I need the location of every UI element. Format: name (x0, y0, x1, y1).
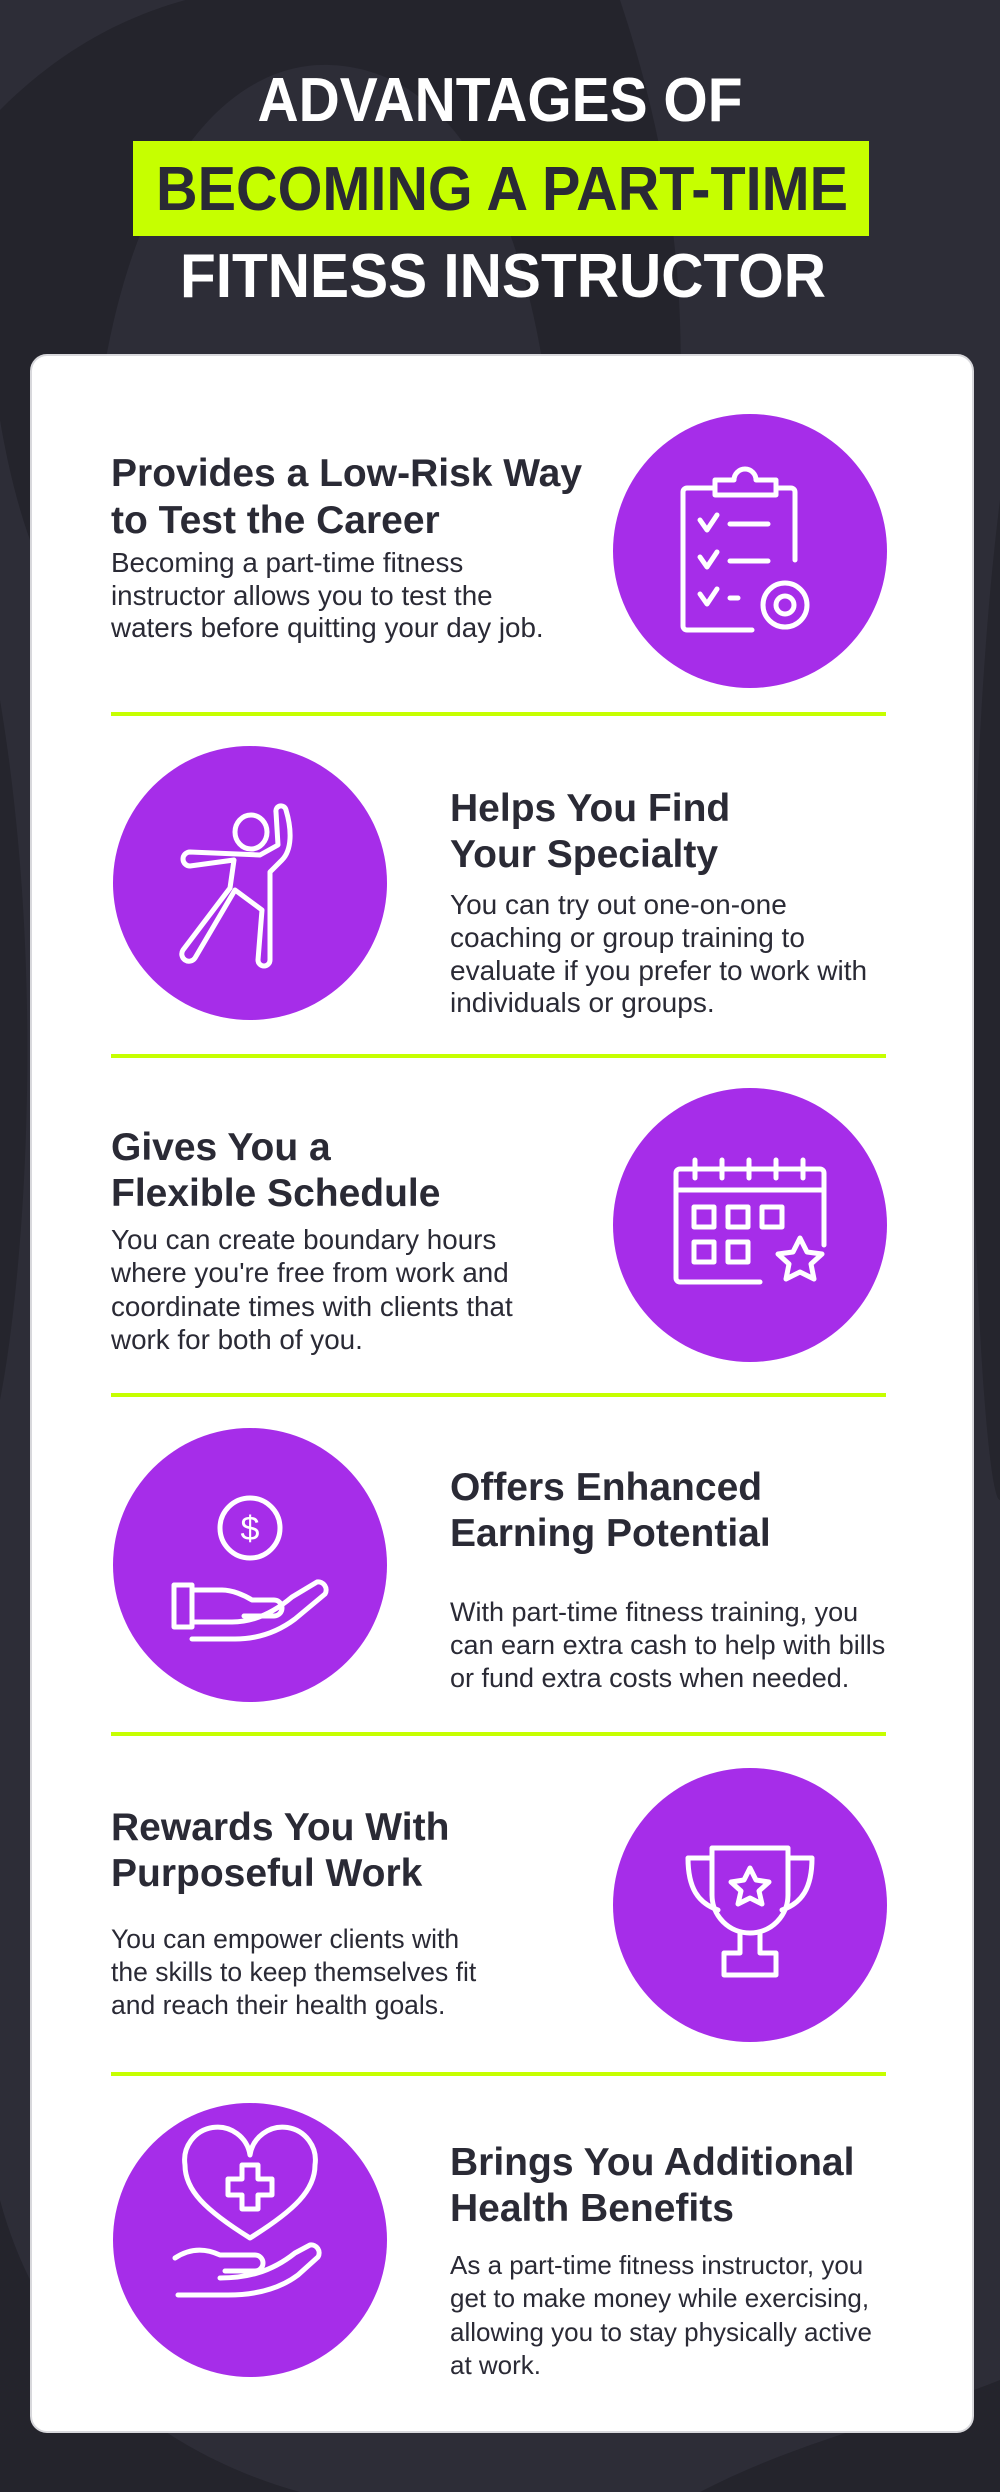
section 4 (113, 1428, 885, 1702)
heading 5: Purposeful Work (111, 1852, 423, 1895)
text 1: Becoming a part-time fitness (111, 547, 463, 578)
text 4: can earn extra cash to help with bills (450, 1630, 885, 1660)
text 5: and reach their health goals. (111, 1990, 445, 2020)
icon: heart hand (113, 2103, 387, 2377)
text 6: As a part-time fitness instructor, you (450, 2250, 863, 2280)
title (133, 66, 869, 311)
section 1 (110, 414, 887, 688)
heading 2: Helps You Find (450, 787, 730, 830)
text 3: coordinate times with clients that (111, 1291, 513, 1322)
title: FITNESS INSTRUCTOR (180, 242, 826, 311)
title: BECOMING A PART-TIME (156, 155, 848, 224)
heading 3: Gives You a (111, 1126, 331, 1169)
text 1: waters before quitting your day job. (110, 612, 544, 643)
text 2: coaching or group training to (450, 922, 805, 953)
text 2: You can try out one-on-one (450, 889, 787, 920)
icon: trophy (613, 1768, 887, 2042)
icon: clipboard (613, 414, 887, 688)
text 3: where you're free from work and (110, 1257, 509, 1288)
text 5: You can empower clients with (111, 1924, 459, 1954)
text 6: get to make money while exercising, (450, 2283, 869, 2313)
heading 3: Flexible Schedule (111, 1172, 440, 1215)
icon: calendar (613, 1088, 887, 1362)
text 4: With part-time fitness training, you (450, 1597, 858, 1627)
panel: card (31, 355, 973, 2432)
section 2 (113, 746, 867, 1020)
text 2: evaluate if you prefer to work with (450, 955, 867, 986)
text 1: instructor allows you to test the (111, 580, 493, 611)
section 3 (110, 1088, 887, 1362)
icon: money hand (113, 1428, 387, 1702)
heading 5: Rewards You With (111, 1806, 449, 1849)
icon: money hand: $ (241, 1510, 260, 1548)
text 4: or fund extra costs when needed. (450, 1663, 849, 1693)
text 6: at work. (450, 2350, 541, 2380)
heading 4: Offers Enhanced (450, 1466, 762, 1509)
heading 2: Your Specialty (450, 833, 718, 876)
icon: person (113, 746, 387, 1020)
text 3: work for both of you. (110, 1324, 363, 1355)
text 5: the skills to keep themselves fit (111, 1957, 477, 1987)
heading 4: Earning Potential (450, 1512, 771, 1555)
text 6: allowing you to stay physically active (450, 2317, 872, 2347)
heading 1: to Test the Career (111, 499, 440, 542)
text 2: individuals or groups. (450, 987, 715, 1018)
heading 6: Brings You Additional (450, 2141, 854, 2184)
heading 1: Provides a Low-Risk Way (111, 452, 582, 495)
section 6 (113, 2103, 872, 2380)
title: ADVANTAGES OF (258, 66, 742, 135)
text 3: You can create boundary hours (111, 1224, 496, 1255)
section 5 (111, 1768, 887, 2042)
heading 6: Health Benefits (450, 2187, 734, 2230)
